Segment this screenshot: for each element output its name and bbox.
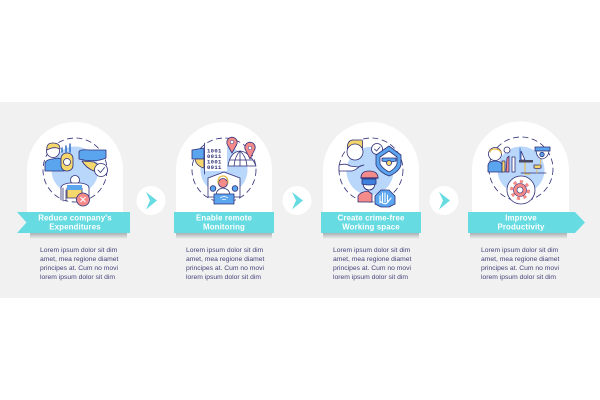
heading 3: Create crime-free <box>338 214 405 222</box>
body text 4: lorem ipsum dolor sit dim <box>481 274 556 281</box>
icon: remote monitoring illustration <box>192 137 256 204</box>
ribbon shadow 4 <box>470 233 567 239</box>
card shape 3 <box>323 122 419 214</box>
ribbon 3 <box>321 212 421 233</box>
card shape 1 <box>27 122 123 214</box>
body text 3: principes at. Cum no movi <box>333 265 412 272</box>
panel: step 2 Enable remote Monitoring <box>174 122 274 281</box>
body text 2: principes at. Cum no movi <box>186 265 265 272</box>
icon: productivity illustration <box>488 137 553 204</box>
heading 1: Expenditures <box>49 222 101 232</box>
body text 1: principes at. Cum no movi <box>40 265 119 272</box>
panel: step 3 Create crime-free Working space <box>321 122 421 281</box>
body text 1: Lorem ipsum dolor sit dim <box>40 247 118 254</box>
arrow button 3 <box>430 186 458 215</box>
icon: remote monitoring illustration: 1001 <box>207 158 222 166</box>
icon: remote monitoring illustration: 0011 <box>207 164 222 171</box>
body text 4: Lorem ipsum dolor sit dim <box>481 247 559 254</box>
heading 1: Reduce company's <box>38 214 112 222</box>
body text 1: amet, mea regione diamet <box>40 256 119 263</box>
icon: remote monitoring illustration: 0011 <box>207 153 222 160</box>
heading 2: Monitoring <box>203 222 245 232</box>
body text 2: lorem ipsum dolor sit dim <box>186 274 261 281</box>
ribbon shadow 3 <box>323 233 419 239</box>
ribbon 1 <box>17 212 130 233</box>
heading 3: Working space <box>342 222 400 232</box>
body text 3: amet, mea regione diamet <box>333 256 412 263</box>
body text 3: Lorem ipsum dolor sit dim <box>333 247 411 254</box>
ribbon shadow 2 <box>176 233 272 239</box>
body text 3: lorem ipsum dolor sit dim <box>333 274 408 281</box>
panel: step 1 Reduce company's Expenditures <box>17 122 130 281</box>
arrow button 2 <box>282 186 312 215</box>
body text 2: Lorem ipsum dolor sit dim <box>186 247 264 254</box>
body text 2: amet, mea regione diamet <box>186 256 265 263</box>
panel: step 4 Improve Productivity <box>468 122 585 281</box>
ribbon shadow 1 <box>30 233 127 239</box>
heading 4: Productivity <box>497 222 545 232</box>
icon: remote monitoring illustration: 1001 <box>207 148 222 154</box>
heading 4: Improve <box>505 214 537 222</box>
body text 4: amet, mea regione diamet <box>481 256 560 263</box>
ribbon 4 <box>468 212 585 233</box>
body text 1: lorem ipsum dolor sit dim <box>40 274 115 281</box>
body text 4: principes at. Cum no movi <box>481 265 560 272</box>
heading 2: Enable remote <box>196 214 252 222</box>
icon: crime-free illustration <box>339 138 403 207</box>
card shape 4 <box>472 122 569 214</box>
ribbon 2 <box>174 212 274 233</box>
icon: expenditures illustration <box>43 138 108 206</box>
arrow button 1 <box>136 186 166 215</box>
card shape 2 <box>176 122 272 214</box>
background band <box>0 102 600 298</box>
